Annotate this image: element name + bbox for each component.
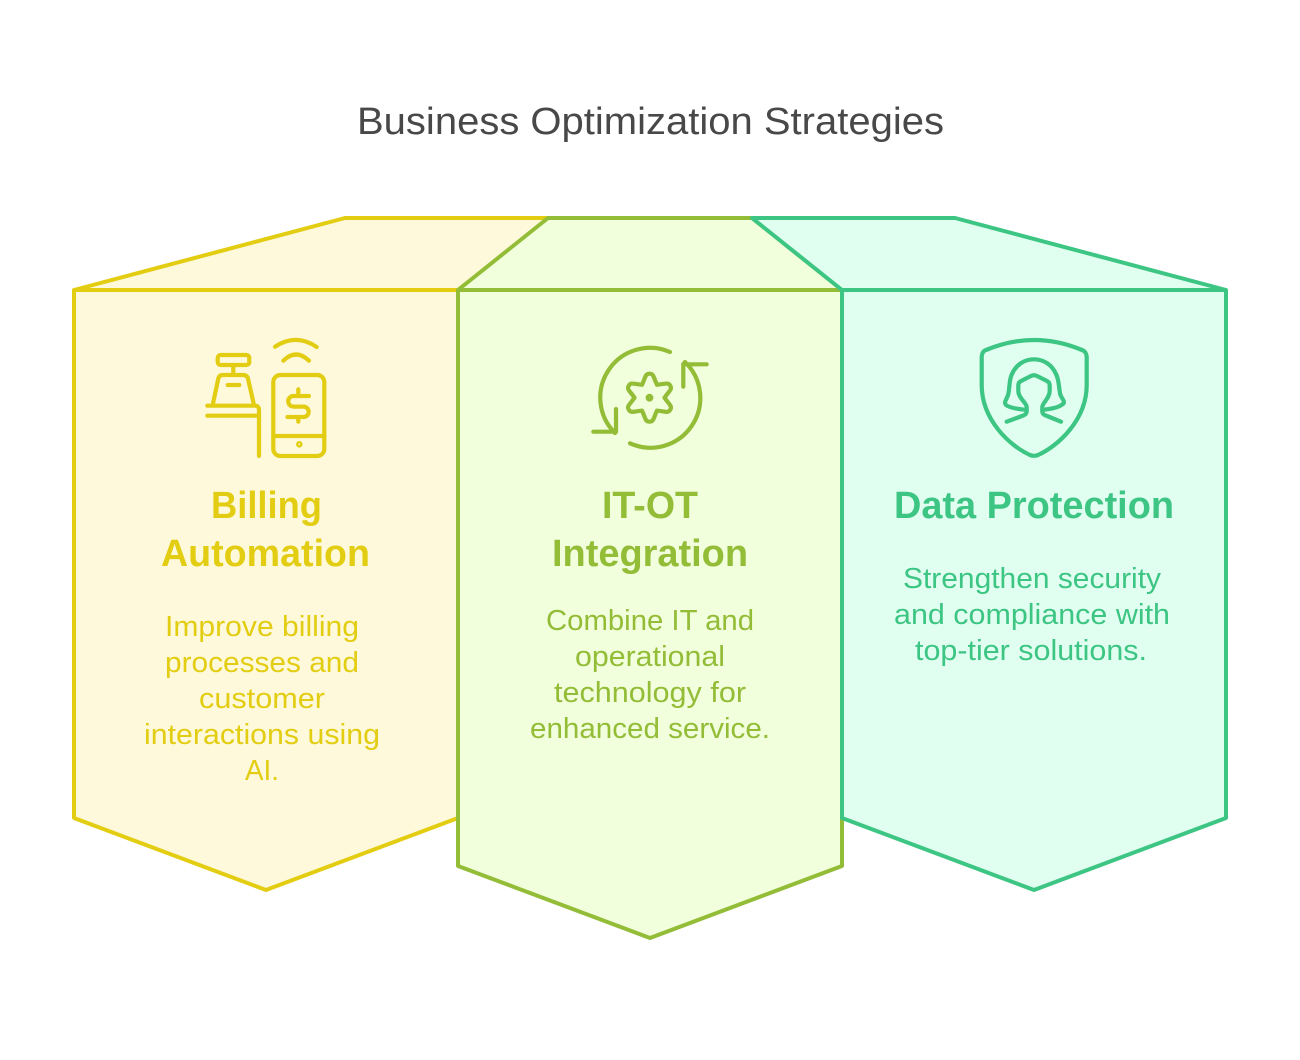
panel: data protection [752,218,1226,890]
description: it-ot integration: enhanced service. [530,713,770,745]
description: it-ot integration: operational [575,641,725,673]
description: data protection: top-tier solutions. [915,635,1147,667]
heading: billing automation: Automation [161,533,370,575]
icon: gear with circular arrows [593,348,707,448]
description: data protection [894,563,1170,667]
heading: it-ot integration [552,485,748,575]
description: it-ot integration [530,605,770,745]
description: it-ot integration: Combine IT and [546,605,754,637]
description: billing automation: Improve billing [165,611,359,643]
description: billing automation [144,611,380,787]
title: Business Optimization Strategies [357,101,944,143]
description: billing automation: AI. [245,755,279,787]
panel shape: teal [752,218,1226,890]
description: data protection: Strengthen security [903,563,1162,595]
panel: billing automation [74,218,550,890]
heading: billing automation [161,485,370,575]
description: billing automation: customer [199,683,325,715]
description: it-ot integration: technology for [554,677,746,709]
description: data protection: and compliance with [894,599,1170,631]
heading: it-ot integration: Integration [552,533,748,575]
panel shape: olive [458,218,842,938]
heading: data protection: Data Protection [894,485,1174,527]
icon: cash register and phone payment [207,340,324,456]
description: billing automation: interactions using [144,719,380,751]
heading: billing automation: Billing [211,485,322,527]
heading: it-ot integration: IT-OT [602,485,698,527]
panel shape: yellow [74,218,550,890]
icon: shield with person [982,340,1087,456]
panel: it-ot integration [458,218,842,938]
description: billing automation: processes and [165,647,359,679]
